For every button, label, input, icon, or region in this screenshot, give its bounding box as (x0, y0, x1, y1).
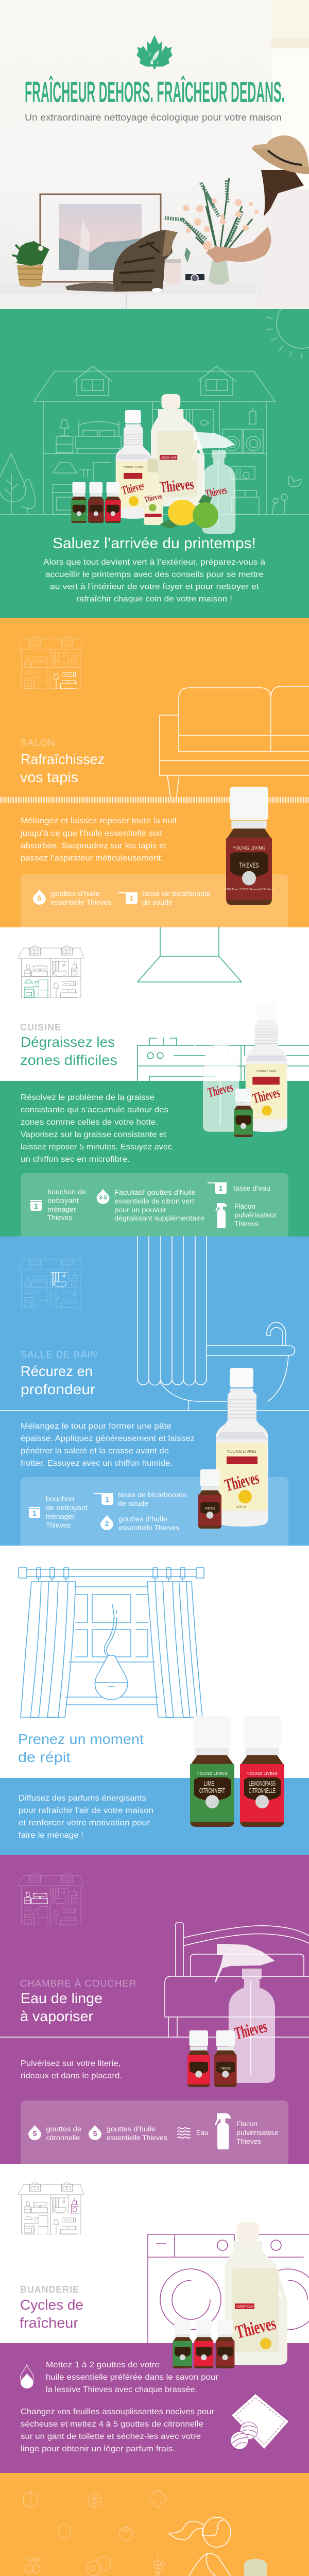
laundry soap jug (225, 2222, 287, 2365)
ingredient: Thieves drops: 5 (93, 2129, 97, 2138)
panel: salle de bain (0, 1236, 309, 1546)
Thieves oil bottle: YOUNG LIVING (233, 845, 266, 851)
ingredient: drops: pour un pouvoir (114, 1206, 167, 1214)
heading: Eau de linge (21, 1990, 102, 2006)
ingredient: cup: 1 (105, 1495, 109, 1503)
panel: cuisine (0, 927, 309, 1236)
lime oil bottle: YOUNG LIVING (197, 1772, 228, 1776)
subtitle: Un extraordinaire nettoyage écologique pour votre maison (25, 112, 282, 123)
ingredient: drops: dégraissant supplémentaire (114, 1214, 204, 1222)
Thieves oil bottle: THIEVES (205, 1507, 215, 1511)
body text: sécheuse et mettez 4 à 5 gouttes de citronnelle (21, 2420, 203, 2429)
body text: la lessive Thieves avec chaque brassée. (46, 2385, 197, 2394)
ingredient: cap: Thieves (47, 1214, 72, 1222)
cabinet (0, 283, 258, 309)
intro text (43, 558, 265, 604)
woman with hat (206, 135, 309, 309)
ingredient: cap: Thieves (46, 1521, 71, 1529)
range hood line drawing (138, 927, 242, 982)
laundry soap jug: Thieves (233, 2313, 278, 2343)
ingredient: cup: tasse de bicarbonate (142, 890, 211, 897)
section label: SALON (21, 738, 55, 748)
body text: frotter. Essuyez avec un chiffon humide. (21, 1459, 173, 1468)
ingredient: cap: ménager (46, 1513, 75, 1520)
ingredient: drops: essentielle Thieves (51, 899, 111, 906)
Thieves oil bottle: 100% Pure, YLTG™ Essential Oil Blend (224, 888, 274, 891)
ingredient: spray bottle: Thieves (234, 1220, 259, 1228)
ingredient: cap (29, 1495, 88, 1529)
heading: Saluez l’arrivée du printemps! (53, 535, 256, 552)
ingredient: cup: tasse d’eau (233, 1184, 270, 1192)
section label: CHAMBRE À COUCHER (20, 1978, 136, 1989)
ingredient: spray bottle (215, 1202, 277, 1228)
glass spray bottle (192, 432, 235, 534)
household cleaner bottle: Thieves (223, 1468, 261, 1495)
product group (71, 394, 235, 534)
body text: Vaporisez sur la graisse consistante et (21, 1130, 167, 1139)
fruit and vegetable icons (23, 2489, 166, 2576)
section label: SALLE DE BAIN (21, 1349, 98, 1360)
body text: huile essentielle préférée dans le savon pour (46, 2373, 219, 2382)
lemongrass oil bottle: YOUNG LIVING (247, 1772, 278, 1776)
heading: zones difficiles (20, 1052, 117, 1068)
body text (21, 1422, 195, 1468)
body text: Diffusez des parfums énergisants (19, 1794, 146, 1803)
body text: consistante qui s’accumule autour des (21, 1106, 168, 1114)
body text: Mélangez le tout pour former une pâte (21, 1422, 171, 1431)
ingredient: cup: 1 (219, 1184, 223, 1192)
ingredient: drops: gouttes d’huile (118, 1515, 167, 1523)
potted plant (12, 241, 49, 287)
body text (21, 2361, 219, 2453)
lime oil bottle (234, 1089, 253, 1137)
heading (18, 1731, 144, 1765)
green band (0, 1081, 309, 1236)
ingredient: cup: tasse de bicarbonate (118, 1491, 186, 1499)
ingredient: lemongrass drops: 5 (33, 2129, 37, 2138)
icon: house with kitchen highlighted (18, 945, 83, 998)
household cleaner bottle: YOUNG LIVING (227, 1449, 256, 1454)
icon: sun (267, 309, 309, 359)
ingredient: Thieves drops: gouttes d’huile (106, 2125, 156, 2133)
ingredient: cup (118, 890, 211, 906)
ingredient: lemongrass drops: citronnelle (46, 2134, 80, 2142)
body text: Mettez 1 à 2 gouttes de votre (46, 2361, 160, 2369)
ingredient: water: Eau (196, 2129, 208, 2137)
icon: maple leaf logo: L (157, 60, 159, 65)
ingredient: drops: essentielle Thieves (118, 1524, 179, 1532)
household cleaner bottle: Thieves (121, 478, 146, 497)
heading: Dégraissez les (21, 1034, 115, 1050)
body text: rideaux et dans le placard. (21, 2072, 122, 2080)
section label: CUISINE (20, 1022, 61, 1032)
Thieves oil bottle (198, 1469, 221, 1529)
ingredient: spray bottle: pulvérisateur (236, 2129, 279, 2137)
stove line drawing (138, 1038, 309, 1081)
cyclist line drawing (0, 2517, 309, 2576)
ingredient: drops: Facultatif gouttes d’huile (114, 1189, 196, 1196)
Thieves oil bottle: THIEVES (239, 861, 259, 869)
candle jar and camera (165, 247, 204, 285)
glass spray bottle (192, 1021, 239, 1132)
body text (19, 1794, 153, 1840)
panel: salon (0, 618, 309, 927)
blue band (0, 1778, 309, 1855)
ingredient: drops (100, 1515, 179, 1532)
ingredient: cap: 1 (32, 1509, 37, 1517)
household cleaner bottle: YOUNG LIVING (123, 466, 143, 469)
bouquet in vase (165, 178, 259, 284)
ingredient: spray bottle: Flacon (236, 2120, 258, 2128)
cat (65, 230, 178, 292)
icon: maple leaf logo (136, 35, 173, 69)
icon: house with laundry highlighted (18, 2182, 83, 2234)
heading (20, 751, 105, 785)
ingredient: drops (97, 1189, 204, 1222)
panel: grignotage (0, 2473, 309, 2576)
ingredient: cap: bouchon (46, 1495, 74, 1503)
section label: BUANDERIE (20, 2284, 79, 2295)
lime oil bottle: LIME (204, 1780, 214, 1787)
body text (20, 817, 177, 862)
shower curtain and sink line drawing (0, 1236, 309, 1411)
body text: absorbée. Saupoudrez sur les tapis et (21, 842, 167, 850)
body text: épaisse. Appliquez généreusement et laissez (21, 1434, 195, 1443)
ingredient: cup: de soude (142, 899, 173, 906)
panel: chambre à coucher (0, 1855, 309, 2164)
ingredient: drops: 2 (105, 1519, 109, 1528)
household cleaner bottle (115, 410, 151, 519)
bed line drawing (0, 1923, 309, 2037)
ingredient panel (21, 1477, 288, 1546)
heading: Rafraîchissez (21, 751, 105, 767)
house line drawing (0, 366, 309, 515)
Thieves oil bottle: THIEVES (220, 2067, 231, 2071)
heading: Récurez en (21, 1363, 93, 1379)
body text (21, 2059, 122, 2080)
ingredient: spray bottle: pulvérisateur (234, 1211, 277, 1219)
ingredient: water (178, 2128, 208, 2138)
ingredient: spray bottle (215, 2113, 279, 2149)
household cleaner bottle: Thieves (251, 1084, 282, 1106)
icon: diffuser (95, 1605, 128, 1700)
glass spray bottle (215, 1944, 275, 2083)
body text: passez l’aspirateur méticuleusement. (21, 854, 163, 862)
ingredient: cup (94, 1491, 186, 1507)
body text: pour rafraîchir l’air de votre maison (19, 1806, 153, 1815)
body text (21, 1093, 172, 1164)
ingredient: drops: 3-5 (99, 1195, 107, 1201)
ingredient: cap: 1 (34, 1202, 38, 1210)
carpet (0, 797, 309, 803)
laundry soap jug: Thieves (159, 475, 195, 496)
lemon and lime (160, 495, 218, 529)
framed picture (40, 194, 161, 282)
lemongrass oil bottle: LEMONGRASS (249, 1780, 276, 1787)
household cleaner bottle (245, 1003, 287, 1132)
intro text: accueillir le printemps avec des conseils pour se mettre (45, 570, 264, 579)
window with curtains line drawing (19, 1568, 204, 1718)
fruit and veggie spray (144, 459, 163, 525)
heading: fraîcheur (20, 2315, 78, 2331)
glass spray bottle: Thieves (207, 1080, 234, 1100)
ingredient panel (21, 2100, 288, 2164)
ingredient: cup: de soude (118, 1500, 148, 1507)
ingredient: Thieves drops (89, 2125, 167, 2142)
heading: profondeur (21, 1381, 95, 1397)
intro text: Alors que tout devient vert à l’extérieur, préparez-vous à (43, 558, 265, 567)
ingredient: drops: gouttes d’huile (51, 890, 100, 897)
intro text: rafraîchir chaque coin de votre maison ! (76, 595, 232, 604)
ingredient: cap: bouchon de (47, 1188, 86, 1196)
icon: maple leaf logo: Y (148, 52, 152, 57)
lemongrass oil bottle (187, 2030, 210, 2087)
panel: prenez un moment de répit (0, 1546, 309, 1855)
body text: Résolvez le problème de la graisse (21, 1093, 154, 1102)
heading: Prenez un moment (18, 1731, 144, 1747)
body text: linge pour obtenir un léger parfum frais. (21, 2445, 175, 2453)
laundry soap jug (151, 394, 204, 506)
panel: buanderie (0, 2164, 309, 2473)
icon: double drop (21, 2365, 33, 2388)
ingredient: cup: 1 (130, 894, 134, 902)
icon: dryer sheet and wool balls (231, 2394, 288, 2449)
heading: de répit (18, 1749, 71, 1765)
body text: pénétrer la saleté et la crasse avant de (21, 1447, 169, 1455)
icon: house with bedroom highlighted (18, 1873, 83, 1925)
lime oil bottle (190, 1716, 234, 1827)
ingredient: cap (30, 1188, 86, 1222)
ingredient: cap: de nettoyant (46, 1504, 88, 1512)
Thieves oil bottle (214, 2030, 237, 2087)
lemongrass oil bottle (240, 1716, 284, 1827)
heading: Cycles de (20, 2297, 83, 2313)
glass spray bottle: Thieves (233, 2017, 269, 2043)
body text: Changez vos feuilles assouplissantes nocives pour (21, 2408, 215, 2416)
heading (20, 2297, 83, 2331)
body text: et renforcer votre motivation pour (19, 1819, 150, 1827)
body text: faire le ménage ! (19, 1831, 83, 1840)
body text: Mélangez et laissez reposer toute la nuit (21, 817, 177, 825)
heading (20, 1990, 102, 2024)
lemongrass oil bottle: CITRONNELLE (249, 1787, 276, 1794)
icon: house with bathroom highlighted (18, 1257, 83, 1308)
ingredient: lemongrass drops: gouttes de (46, 2125, 81, 2133)
household cleaner bottle: YOUNG LIVING (256, 1070, 277, 1073)
heading (21, 1363, 95, 1397)
panel: spring intro (0, 309, 309, 618)
ingredient: cap: ménager (47, 1206, 77, 1213)
Thieves oil bottle (224, 787, 274, 905)
ingredient: cap: nettoyant (47, 1197, 79, 1205)
laundry soap jug: LAUNDRY SOAP (161, 456, 177, 460)
household cleaner bottle (215, 1368, 268, 1527)
purple band (0, 2343, 309, 2473)
body text: laissez reposer 5 minutes. Essuyez avec (21, 1143, 172, 1151)
glass spray bottle: Thieves (204, 483, 228, 500)
ingredient panel (21, 874, 288, 927)
ingredient: lemongrass drops (28, 2125, 81, 2142)
ingredient panel (21, 1173, 288, 1236)
heading (20, 1034, 117, 1068)
sofa line drawing (160, 686, 309, 797)
fruit and veggie spray (234, 2559, 278, 2576)
heading: à vaporiser (20, 2008, 93, 2024)
ingredient: cup (208, 1182, 270, 1194)
intro text: au vert à l’intérieur de votre foyer et pour nettoyer et (50, 582, 260, 591)
heading: vos tapis (20, 769, 78, 785)
ingredient: spray bottle: Thieves (236, 2138, 261, 2145)
ingredient: drops (33, 889, 111, 906)
washing machines line drawing (148, 2234, 309, 2343)
ingredient: drops: 5 (38, 894, 42, 902)
household cleaner bottle: 426 ml (236, 1506, 246, 1509)
ingredient: drops: essentielle de citron vert (114, 1197, 194, 1205)
body text: zones comme celles de votre hotte. (21, 1118, 158, 1127)
lime oil bottle: CITRON VERT (199, 1787, 225, 1794)
body text: jusqu’à ce que l’huile essentielle soit (20, 829, 163, 838)
laundry soap jug: LAUNDRY SOAP (236, 2305, 253, 2309)
ingredient: Thieves drops: essentielle Thieves (106, 2134, 167, 2142)
body text: sur un gant de toilette et séchez-les avec votre (21, 2432, 201, 2441)
essential oil bottles (71, 482, 121, 523)
body text: Pulvérisez sur votre literie, (21, 2059, 121, 2068)
fruit and veggie spray: Thieves (144, 492, 163, 504)
panel: hero photo header (0, 0, 309, 309)
body text: un chiffon sec en microfibre. (21, 1155, 130, 1164)
essential oil bottles (173, 2320, 234, 2368)
icon: house with living room highlighted (18, 636, 83, 689)
ingredient: spray bottle: Flacon (234, 1202, 255, 1210)
